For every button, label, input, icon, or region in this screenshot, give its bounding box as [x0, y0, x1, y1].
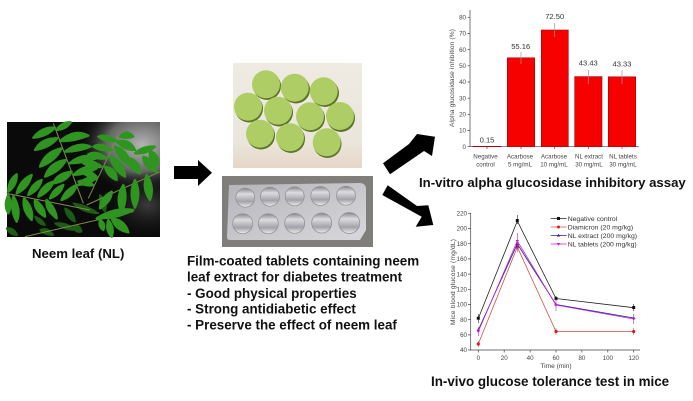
text block: tablet description: - Good physical properties — [187, 286, 357, 301]
bar values: 43.33 — [612, 60, 632, 68]
axis titles: Mice blood glucose (mg/dL) — [450, 239, 457, 325]
y tick labels: 180 — [457, 241, 468, 248]
chart axes — [468, 10, 639, 149]
series: diamicron — [477, 242, 635, 347]
line chart: blood glucose — [450, 210, 640, 370]
label: neem leaf: Neem leaf (NL) — [32, 246, 124, 261]
text block: tablet description: Film-coated tablets containing neem — [187, 254, 419, 269]
y tick labels: 140 — [457, 271, 468, 278]
y tick labels: 200 — [457, 226, 468, 233]
bars — [473, 30, 636, 147]
y tick labels: 0 — [463, 144, 467, 151]
y tick labels: 80 — [459, 14, 467, 22]
bar values: 55.16 — [511, 42, 530, 51]
y tick labels: 160 — [457, 256, 468, 263]
text block: tablet description: - Preserve the effect of neem leaf — [187, 318, 397, 333]
bar labels: Acarbose — [541, 154, 568, 160]
x tick labels: 20 — [501, 355, 508, 362]
bar labels: Acarbose — [507, 154, 534, 160]
bar labels: 5 mg/mL — [508, 162, 533, 168]
legend: NL tablets (200 mg/kg) — [568, 241, 637, 248]
series: NL extract — [477, 242, 635, 331]
y tick labels: 70 — [459, 31, 467, 38]
y tick labels: 120 — [457, 286, 468, 294]
text block: tablet description — [187, 254, 419, 333]
text block: tablet description: leaf extract for diabetes treatment — [187, 270, 403, 285]
heading: in-vivo test: In-vivo glucose tolerance test in mice — [431, 374, 669, 389]
y tick labels: 40 — [459, 79, 467, 86]
bar chart: alpha glucosidase inhibition — [449, 10, 639, 168]
y tick labels: 60 — [459, 47, 467, 54]
legend: Diamicron (20 mg/kg) — [568, 224, 633, 231]
arrow: to in-vitro assay — [383, 134, 435, 174]
chart axes — [468, 213, 640, 352]
x tick labels: 120 — [629, 355, 639, 362]
x tick labels: 80 — [578, 355, 586, 362]
bar labels: Negative — [473, 154, 498, 160]
bar labels: NL tablets — [609, 154, 637, 160]
y tick labels: 20 — [459, 112, 467, 118]
error bars — [521, 23, 622, 84]
legend — [551, 216, 637, 248]
x tick labels: 60 — [553, 355, 560, 362]
bar labels: NL extract — [575, 154, 603, 160]
photo: neem leaf branch — [6, 122, 160, 237]
bar labels: 30 mg/mL — [575, 162, 603, 168]
bar values: 72.50 — [545, 12, 564, 21]
bar labels: 30 mg/mL — [609, 162, 637, 168]
heading: in-vitro assay: In-vitro alpha glucosidase inhibitory assay — [419, 175, 686, 190]
y axis title: Alpha glucosidase inhibition (%) — [449, 29, 456, 127]
y tick labels: 40 — [460, 347, 468, 354]
bar values: 43.43 — [579, 58, 598, 68]
arrow: leaf to tablets — [174, 160, 212, 186]
y tick labels — [457, 210, 468, 354]
x tick labels: 0 — [477, 355, 481, 362]
y tick labels: 100 — [457, 302, 468, 309]
bar labels: control — [476, 162, 495, 168]
legend: Negative control — [568, 216, 618, 223]
legend: NL extract (200 mg/kg) — [568, 233, 637, 240]
series: negative control — [477, 215, 635, 323]
bar values — [480, 12, 632, 144]
x tick labels — [477, 355, 639, 362]
bar labels — [473, 154, 637, 168]
line chart: blood glucose: Time (min) — [540, 363, 572, 370]
y tick labels: 60 — [460, 332, 468, 339]
y tick labels: 80 — [460, 317, 468, 324]
x tick labels: 100 — [603, 355, 614, 362]
text block: tablet description: - Strong antidiabetic effect — [187, 302, 356, 317]
bar values: 0.15 — [480, 136, 494, 144]
photo: blister pack — [222, 176, 373, 247]
y tick labels: 220 — [457, 210, 468, 218]
x tick labels: 40 — [527, 355, 534, 362]
bar labels: 10 mg/mL — [540, 162, 568, 168]
y tick labels: 30 — [459, 95, 467, 102]
photo: green tablets — [233, 63, 362, 168]
series: NL tablets — [477, 233, 635, 336]
y tick labels: 50 — [459, 63, 467, 70]
arrow: to in-vivo test — [382, 185, 433, 227]
y tick labels: 10 — [459, 128, 467, 135]
y tick labels — [459, 14, 467, 151]
